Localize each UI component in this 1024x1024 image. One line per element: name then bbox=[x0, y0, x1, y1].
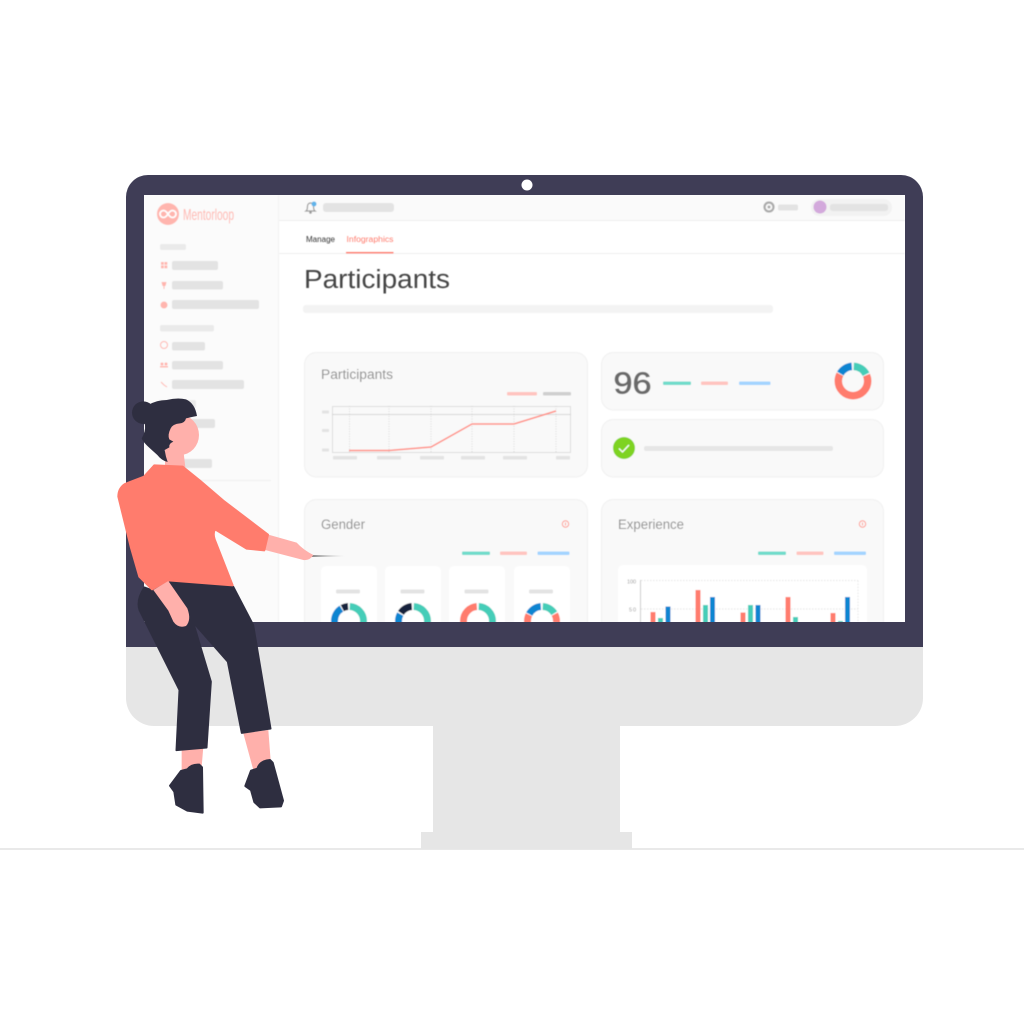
panel: status bbox=[602, 420, 884, 477]
person trousers bbox=[138, 582, 271, 750]
icon: info bbox=[859, 521, 866, 527]
icon: globe bbox=[764, 202, 774, 212]
tabs bbox=[279, 235, 905, 254]
floor line bbox=[0, 848, 1024, 850]
bar chart: 50 bbox=[629, 608, 636, 614]
donut card 2 bbox=[394, 590, 432, 622]
person neck bbox=[165, 448, 185, 467]
panel: experience: Experience bbox=[618, 517, 684, 532]
bar chart bbox=[628, 579, 858, 622]
illustration: person presenting a dashboard on a desktop monitor bbox=[0, 175, 1024, 850]
panel: participants line chart: Participants bbox=[321, 367, 393, 382]
person forearm bbox=[265, 535, 313, 560]
tabs: Manage bbox=[306, 235, 336, 244]
monitor chin bbox=[126, 640, 923, 726]
icon: bell bbox=[306, 202, 316, 214]
subtitle placeholder bbox=[304, 306, 772, 312]
monitor stand neck bbox=[433, 720, 620, 833]
line chart bbox=[322, 406, 571, 460]
donut card 3 bbox=[460, 590, 496, 622]
logo: Mentorloop bbox=[183, 207, 234, 224]
icon: check bbox=[613, 437, 635, 459]
page title: Participants bbox=[304, 266, 450, 294]
donut card 4 bbox=[524, 590, 560, 622]
person bbox=[118, 398, 313, 813]
sidebar bbox=[144, 195, 279, 622]
sidebar menu placeholders bbox=[158, 244, 259, 468]
screen bbox=[144, 195, 905, 640]
legend bbox=[758, 552, 866, 555]
logo bbox=[157, 203, 234, 225]
person right shoe bbox=[245, 760, 283, 807]
panel: participants line chart bbox=[304, 352, 588, 477]
person legs skin bbox=[182, 730, 271, 772]
user pill bbox=[812, 200, 889, 214]
panel: gender bbox=[304, 499, 588, 622]
panel: experience bbox=[601, 499, 884, 622]
pointer line from finger bbox=[310, 555, 345, 557]
person shirt bbox=[118, 465, 268, 589]
bar chart: 100 bbox=[627, 580, 636, 586]
donut card 1 bbox=[330, 590, 368, 622]
person hair bbox=[132, 398, 197, 462]
panel: total count bbox=[602, 352, 884, 410]
camera bbox=[522, 180, 532, 190]
person face bbox=[161, 415, 199, 455]
donut chart bbox=[838, 366, 868, 396]
legend bbox=[507, 392, 571, 396]
panel: gender: Gender bbox=[321, 517, 365, 532]
monitor stand base bbox=[421, 832, 632, 849]
monitor frame bbox=[126, 175, 923, 647]
icon: info bbox=[562, 521, 569, 527]
top bar bbox=[279, 195, 905, 221]
panel: total count: 96 bbox=[614, 366, 652, 400]
legend bbox=[663, 382, 770, 385]
monitor bbox=[126, 175, 923, 849]
tabs: Infographics bbox=[346, 235, 394, 244]
sidebar menu icons bbox=[160, 262, 168, 387]
legend bbox=[462, 552, 570, 555]
person left shoe bbox=[170, 765, 203, 813]
person hand on hip bbox=[153, 581, 189, 627]
